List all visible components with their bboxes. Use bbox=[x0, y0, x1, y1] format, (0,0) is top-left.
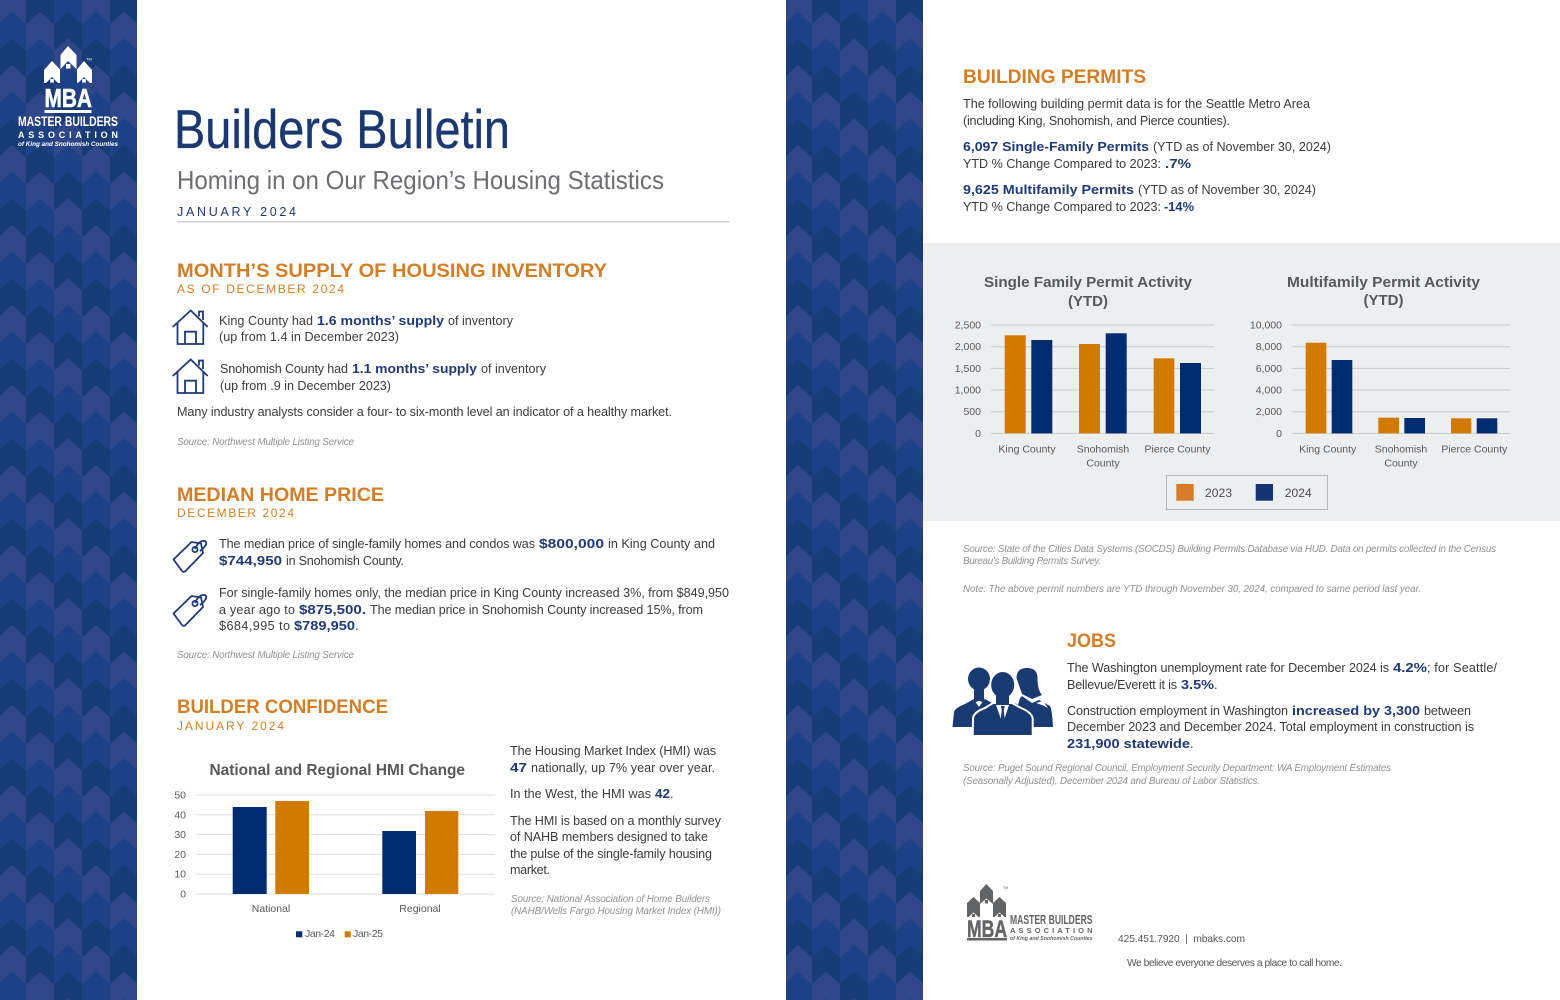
source: Source: National Association of Home Builders bbox=[511, 894, 710, 905]
bar chart: single family permit activity: 500 bbox=[963, 406, 981, 418]
bar chart: national and regional HMI change: 10 bbox=[174, 869, 186, 881]
text: snohomish county supply: Snohomish County had bbox=[220, 362, 348, 376]
text: HMI commentary: nationally, up 7% year over year. bbox=[531, 761, 715, 775]
logo: Master Builders Association white bbox=[18, 46, 118, 148]
bar chart: multifamily permit activity: 2,000 bbox=[1256, 406, 1282, 418]
bar chart: single family permit activity: County bbox=[1086, 458, 1120, 470]
panel: months supply of housing inventory bbox=[173, 260, 672, 448]
left chevron side band bbox=[0, 0, 137, 1000]
bar chart: national and regional HMI change: 30 bbox=[174, 829, 186, 841]
text: permit intro bbox=[963, 97, 1310, 128]
text: permit data sources: Note: The above permit numbers are YTD through November 30, 2024, compared to same period last year. bbox=[963, 584, 1421, 595]
text: permit intro: The following building permit data is for the Seattle Metro Area bbox=[963, 97, 1310, 111]
bar chart: national and regional HMI change: National and Regional HMI Change bbox=[210, 762, 465, 779]
source bbox=[963, 763, 1391, 787]
bar chart: national and regional HMI change bbox=[174, 762, 495, 940]
bar chart: multifamily permit activity: 4,000 bbox=[1256, 384, 1282, 396]
text: median price all homes: $800,000 bbox=[539, 536, 604, 551]
text: multifamily permits: 9,625 Multifamily Permits bbox=[963, 182, 1134, 197]
text: construction employment: increased by 3,300 bbox=[1292, 703, 1420, 718]
text: permit intro: (including King, Snohomish, and Pierce counties). bbox=[963, 114, 1230, 128]
source: (NAHB/Wells Fargo Housing Market Index (HMI)) bbox=[511, 906, 721, 917]
text: HMI commentary: 42 bbox=[655, 786, 670, 801]
bar chart: multifamily permit activity: King County bbox=[1299, 444, 1357, 456]
text: snohomish county supply: (up from .9 in December 2023) bbox=[220, 379, 391, 393]
text: unemployment: 3.5% bbox=[1181, 677, 1214, 692]
bar chart: national and regional HMI change: Jan-25 bbox=[353, 928, 383, 940]
bar chart: multifamily permit activity: 8,000 bbox=[1256, 341, 1282, 353]
source: Source: Northwest Multiple Listing Service bbox=[177, 437, 355, 448]
subtitle: Homing in on Our Region’s Housing Statistics bbox=[177, 165, 664, 195]
text: king county supply: of inventory bbox=[448, 314, 514, 328]
text: construction employment: Construction employment in Washington bbox=[1067, 704, 1288, 718]
bar chart: single family permit activity: Snohomish bbox=[1077, 444, 1129, 456]
icon: price tag bbox=[174, 595, 206, 626]
icon: business people bbox=[952, 668, 1053, 736]
text: king county supply: King County had bbox=[219, 314, 313, 328]
logo: Master Builders Association grey: MASTER BUILDERS bbox=[1010, 913, 1092, 927]
text: HMI commentary: 47 bbox=[510, 760, 527, 775]
text: median price all homes: The median price of single-family homes and condos was bbox=[219, 537, 535, 551]
center chevron side band bbox=[786, 0, 923, 1000]
text: multifamily permits: YTD % Change Compared to 2023: bbox=[963, 200, 1161, 214]
footer tagline: We believe everyone deserves a place to call home. bbox=[1127, 958, 1342, 969]
text: multifamily permits bbox=[963, 182, 1316, 214]
text: single-family permits: YTD % Change Compared to 2023: bbox=[963, 157, 1161, 171]
text: median price single-family: $789,950 bbox=[294, 618, 355, 633]
subheading: as of december: AS OF DECEMBER 2024 bbox=[177, 282, 344, 296]
text: single-family permits bbox=[963, 139, 1331, 171]
bar chart: single family permit activity: Single Family Permit Activity bbox=[984, 274, 1193, 291]
legend: 2023 and 2024: 2024 bbox=[1285, 486, 1312, 500]
subheading: december 2024: DECEMBER 2024 bbox=[177, 506, 294, 520]
source: Source: Puget Sound Regional Council, Employment Security Department: WA Employment Estimates bbox=[963, 763, 1391, 774]
text: multifamily permits: (YTD as of November 30, 2024) bbox=[1138, 183, 1316, 197]
text: median price all homes: in Snohomish County. bbox=[286, 554, 404, 568]
panel: median home price bbox=[174, 484, 729, 661]
text: snohomish county supply: of inventory bbox=[481, 362, 547, 376]
source: Source: Northwest Multiple Listing Service bbox=[177, 650, 355, 661]
footer contact: 425.451.7920 | mbaks.com bbox=[1118, 934, 1245, 945]
bar chart: national and regional HMI change: 20 bbox=[174, 849, 186, 861]
text: snohomish county supply bbox=[220, 361, 547, 393]
bar chart: national and regional HMI change: 0 bbox=[180, 888, 186, 900]
text: construction employment: . bbox=[1190, 737, 1194, 751]
logo: Master Builders Association grey: ASSOCIATION bbox=[1010, 926, 1092, 935]
bar chart: multifamily permit activity: 6,000 bbox=[1256, 363, 1282, 375]
bar chart: single family permit activity: 1,500 bbox=[955, 363, 981, 375]
heading: median home price: MEDIAN HOME PRICE bbox=[177, 484, 384, 506]
logo: Master Builders Association white: MASTER BUILDERS bbox=[18, 114, 118, 129]
text: king county supply bbox=[219, 313, 514, 344]
source: (Seasonally Adjusted), December 2024 and Bureau of Labor Statistics. bbox=[963, 776, 1260, 787]
text: permit data sources: Bureau’s Building Permits Survey. bbox=[963, 556, 1101, 567]
text: median price single-family: $875,500. bbox=[299, 602, 366, 617]
text: snohomish county supply: 1.1 months’ supply bbox=[352, 361, 478, 376]
text: construction employment: 231,900 statewide bbox=[1067, 736, 1190, 751]
bar chart: national and regional HMI change: Jan-24 bbox=[305, 928, 335, 940]
text: single-family permits: (YTD as of November 30, 2024) bbox=[1153, 140, 1331, 154]
text: construction employment: between bbox=[1424, 704, 1471, 718]
logo: Master Builders Association grey: TM bbox=[1003, 886, 1008, 890]
text: unemployment: . bbox=[1214, 678, 1218, 692]
text: unemployment bbox=[1067, 660, 1498, 692]
legend: 2023 and 2024 bbox=[1166, 476, 1328, 510]
bar chart: multifamily permit activity: 0 bbox=[1276, 428, 1282, 440]
bar chart: single family permit activity: 0 bbox=[975, 428, 981, 440]
text: analyst note: Many industry analysts consider a four- to six-month level an indicator of a healthy market. bbox=[177, 405, 672, 419]
text: median price all homes: $744,950 bbox=[219, 553, 282, 568]
text: median price all homes: in King County and bbox=[608, 537, 715, 551]
bar chart: multifamily permit activity: 10,000 bbox=[1250, 320, 1282, 332]
text: permit data sources: Source: State of the Cities Data Systems (SOCDS) Building Permits Database via HUD. Data on permits collected in the Census bbox=[963, 544, 1496, 555]
text: HMI commentary: market. bbox=[510, 863, 550, 877]
heading: months supply: MONTH’S SUPPLY OF HOUSING INVENTORY bbox=[177, 260, 607, 282]
bar chart: national and regional HMI change: 50 bbox=[174, 790, 186, 802]
logo: Master Builders Association white: of King and Snohomish Counties bbox=[18, 141, 118, 148]
heading: builder confidence: BUILDER CONFIDENCE bbox=[177, 696, 388, 718]
logo: Master Builders Association white: MBA bbox=[44, 83, 92, 113]
text: single-family permits: .7% bbox=[1165, 156, 1192, 171]
bar chart: multifamily permit activity: Pierce County bbox=[1441, 444, 1508, 456]
logo: Master Builders Association grey bbox=[967, 884, 1092, 943]
icon: house bbox=[173, 310, 208, 344]
logo: Master Builders Association white: TM bbox=[86, 56, 92, 62]
text: construction employment bbox=[1067, 703, 1474, 751]
source bbox=[511, 894, 721, 917]
bar chart: multifamily permit activity bbox=[1250, 274, 1510, 470]
text: median price single-family: For single-family homes only, the median price in King County increased 3%, from $849,950 bbox=[219, 586, 729, 600]
text: median price single-family: The median price in Snohomish County increased 15%, from bbox=[370, 603, 703, 617]
bar chart: single family permit activity: 1,000 bbox=[955, 384, 981, 396]
panel: building permits bbox=[963, 66, 1331, 214]
text: HMI commentary: the pulse of the single-family housing bbox=[510, 847, 712, 861]
text: median price all homes bbox=[219, 536, 715, 568]
bar chart: single family permit activity: (YTD) bbox=[1068, 293, 1108, 310]
icon: price tag bbox=[174, 541, 206, 572]
text: median price single-family: . bbox=[355, 619, 358, 633]
bar chart: single family permit activity: King County bbox=[998, 444, 1056, 456]
date: JANUARY 2024 bbox=[177, 205, 296, 219]
text: king county supply: (up from 1.4 in December 2023) bbox=[219, 330, 399, 344]
text: median price single-family bbox=[219, 586, 729, 633]
bar chart: single family permit activity: 2,500 bbox=[955, 320, 981, 332]
bar chart: single family permit activity: 2,000 bbox=[955, 341, 981, 353]
heading: building permits: BUILDING PERMITS bbox=[963, 66, 1146, 88]
title: Builders Bulletin bbox=[174, 98, 510, 160]
panel: jobs bbox=[952, 630, 1498, 787]
bar chart: national and regional HMI change: Regional bbox=[399, 903, 441, 915]
text: unemployment: ; for Seattle/ bbox=[1427, 661, 1498, 675]
logo: Master Builders Association white: ASSOCIATION bbox=[18, 130, 118, 140]
bar chart: multifamily permit activity: Multifamily Permit Activity bbox=[1287, 274, 1481, 291]
text: unemployment: Bellevue/Everett it is bbox=[1067, 678, 1177, 692]
subheading: january 2024: JANUARY 2024 bbox=[177, 719, 284, 733]
text: HMI commentary: . bbox=[670, 787, 674, 801]
text: construction employment: December 2023 and December 2024. Total employment in construction is bbox=[1067, 720, 1474, 734]
logo: Master Builders Association grey: of King and Snohomish Counties bbox=[1010, 936, 1092, 942]
text: median price single-family: a year ago to bbox=[219, 603, 295, 617]
logo: Master Builders Association grey: MBA bbox=[967, 916, 1007, 943]
text: HMI commentary: In the West, the HMI was bbox=[510, 787, 651, 801]
bar chart: multifamily permit activity: Snohomish bbox=[1375, 444, 1427, 456]
text: multifamily permits: -14% bbox=[1164, 199, 1194, 214]
heading: jobs: JOBS bbox=[1067, 630, 1116, 652]
bar chart: single family permit activity: Pierce County bbox=[1145, 444, 1211, 456]
panel: permit charts band bbox=[923, 243, 1560, 521]
text: HMI commentary bbox=[510, 744, 722, 877]
text: HMI commentary: The HMI is based on a monthly survey bbox=[510, 814, 722, 828]
text: HMI commentary: of NAHB members designed to take bbox=[510, 830, 708, 844]
text: unemployment: 4.2% bbox=[1393, 660, 1427, 675]
icon: house bbox=[173, 360, 208, 393]
text: king county supply: 1.6 months’ supply bbox=[317, 313, 445, 328]
text: permit data sources bbox=[963, 544, 1496, 595]
bar chart: multifamily permit activity: (YTD) bbox=[1364, 292, 1404, 309]
text: HMI commentary: The Housing Market Index (HMI) was bbox=[510, 744, 716, 758]
legend: 2023 and 2024: 2023 bbox=[1205, 486, 1232, 500]
panel: builder confidence bbox=[174, 696, 722, 940]
bar chart: multifamily permit activity: County bbox=[1384, 458, 1418, 470]
bar chart: national and regional HMI change: 40 bbox=[174, 809, 186, 821]
bar chart: national and regional HMI change: National bbox=[252, 903, 290, 915]
text: unemployment: The Washington unemployment rate for December 2024 is bbox=[1067, 661, 1389, 675]
text: single-family permits: 6,097 Single-Family Permits bbox=[963, 139, 1149, 154]
text: median price single-family: $684,995 to bbox=[219, 619, 290, 633]
bar chart: single family permit activity bbox=[955, 274, 1214, 470]
